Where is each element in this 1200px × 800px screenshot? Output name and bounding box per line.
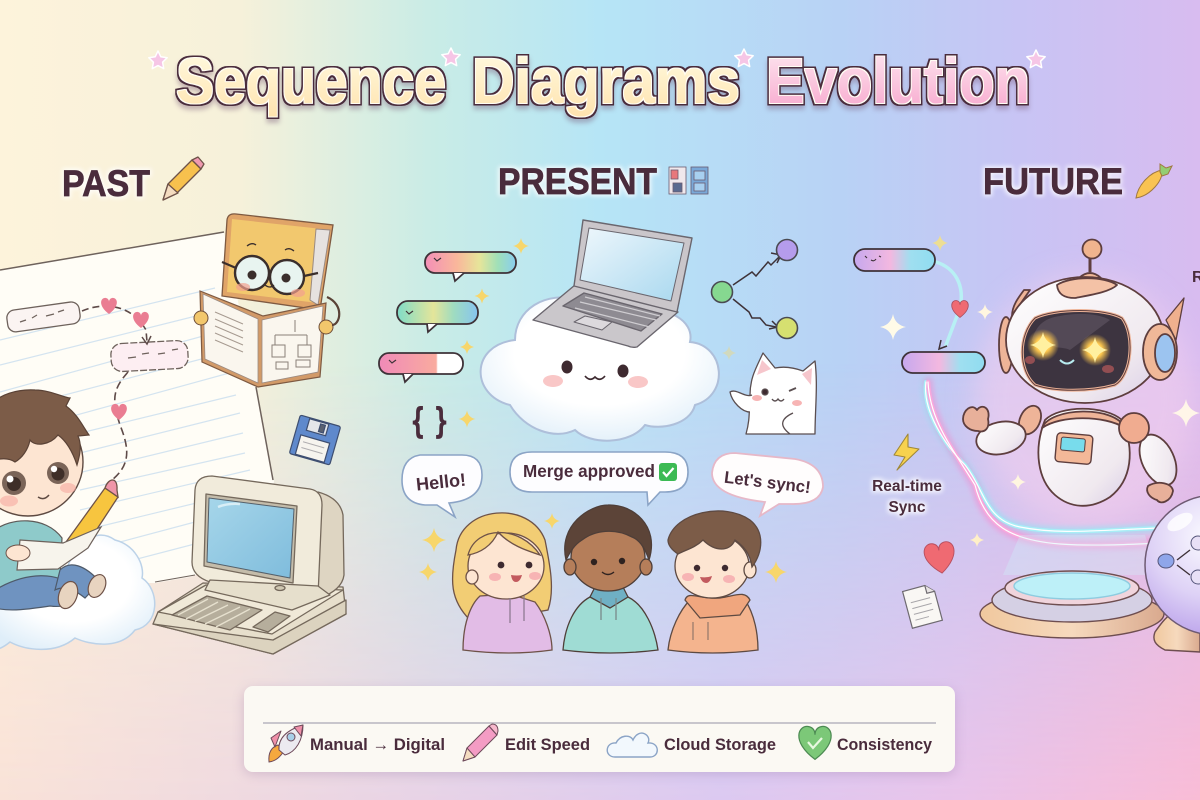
robot head — [999, 277, 1184, 403]
robot left arm — [963, 402, 1045, 459]
child: curly-haired boy — [563, 505, 658, 653]
title — [176, 45, 1030, 117]
icon: cloud — [607, 733, 657, 757]
label: real-time sync: Sync — [888, 499, 926, 516]
legend text: manual to digital: Manual → Digital — [310, 736, 445, 754]
crystal ball — [1145, 495, 1200, 652]
sequence pills — [854, 249, 985, 373]
title stars — [149, 48, 1045, 69]
happy cloud — [481, 295, 719, 441]
robot chest panel — [1055, 432, 1093, 465]
icon: rocket — [269, 725, 303, 762]
speech bubble: merge approved: Merge approved — [523, 461, 655, 481]
robot antenna — [1079, 240, 1102, 278]
label: real-time sync: Real-time — [872, 478, 942, 495]
speech bubble: hello — [402, 455, 482, 517]
title: Evolution — [766, 45, 1030, 117]
panel: future illustration — [854, 235, 1200, 652]
hearts and sparkles — [880, 235, 1200, 547]
speech bubble: let's sync: Let's sync! — [723, 468, 812, 497]
icon: green heart — [799, 726, 831, 759]
sequence boxes and dashed path — [6, 298, 189, 480]
heading: past: PAST — [62, 163, 150, 204]
child: blonde girl — [453, 513, 552, 653]
icon: floppy disk — [289, 415, 341, 465]
glowing data path — [926, 262, 1160, 545]
label: real-time sync — [872, 478, 942, 516]
icon: document — [903, 584, 942, 628]
child with pencil — [0, 390, 118, 611]
icon: heading carrot pencil — [1136, 164, 1172, 198]
icon: pink pencil — [463, 724, 498, 761]
heading: future: FUTURE — [983, 161, 1123, 202]
panel: past illustration — [0, 214, 346, 654]
chat bars — [379, 252, 516, 382]
retro computer — [153, 476, 346, 654]
cloud seat — [0, 535, 155, 650]
title: Diagrams — [472, 45, 740, 117]
cat — [730, 353, 816, 434]
panel: bottom legend — [244, 686, 955, 774]
robot body — [1038, 409, 1130, 506]
legend text: consistency: Consistency — [837, 736, 933, 754]
icon: heading panels — [669, 167, 708, 194]
icon: lightning — [894, 434, 919, 470]
branching graph — [712, 240, 798, 338]
speech bubble: merge approved — [510, 452, 688, 505]
laptop — [533, 220, 692, 347]
speech bubble: let's sync — [712, 453, 823, 516]
hologram platform — [980, 535, 1164, 638]
heading: present: PRESENT — [498, 161, 657, 202]
paper sheet — [0, 232, 274, 583]
robot right arm — [1119, 413, 1184, 502]
robot glow — [975, 275, 1195, 525]
book character — [194, 214, 339, 387]
legend text: cloud storage: Cloud Storage — [664, 736, 776, 754]
panel: present illustration — [379, 220, 823, 653]
curly braces: { } — [410, 401, 449, 442]
title: Sequence — [176, 45, 446, 117]
speech bubble: hello: Hello! — [415, 470, 467, 495]
child: brown-haired boy — [668, 511, 761, 653]
icon: red heart — [923, 541, 957, 575]
robot — [963, 240, 1184, 506]
icon: heading pencil — [163, 157, 204, 200]
sparkles around chat bars — [419, 238, 787, 583]
legend text: edit speed: Edit Speed — [505, 736, 590, 754]
